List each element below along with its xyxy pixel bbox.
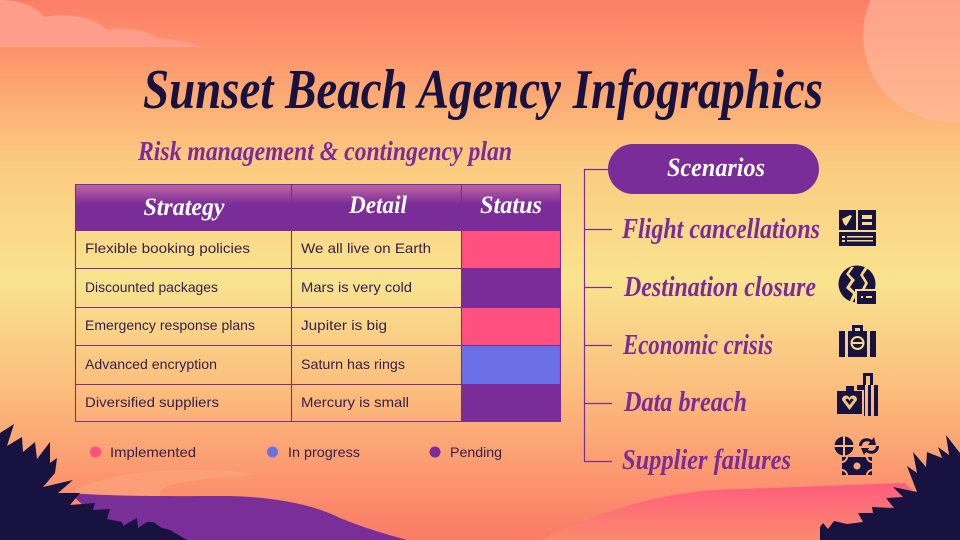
icon: supplier globe and money (834, 436, 879, 475)
table text: Advanced encryption (85, 356, 217, 372)
subtitle: Risk management & contingency plan (137, 136, 512, 166)
table text (85, 240, 431, 410)
legend: In progress (288, 444, 360, 460)
table text: We all live on Earth (301, 240, 431, 256)
title: Sunset Beach Agency Infographics (143, 59, 823, 121)
table text: Mercury is small (301, 394, 409, 410)
scenario labels: Destination closure (623, 271, 816, 303)
table text: Diversified suppliers (85, 394, 219, 410)
palm left (0, 424, 187, 540)
table (75, 184, 561, 422)
scenario labels: Economic crisis (622, 329, 773, 361)
table header: Detail (348, 192, 407, 219)
table text: Saturn has rings (301, 356, 405, 372)
status cells (461, 230, 561, 422)
table text: Emergency response plans (85, 317, 255, 333)
table text: Flexible booking policies (85, 240, 250, 256)
scenario labels: Flight cancellations (621, 213, 820, 245)
table text: Mars is very cold (301, 279, 412, 295)
table header: Strategy (144, 194, 225, 221)
scenario labels (621, 213, 820, 476)
table header (75, 184, 561, 230)
cloud top left (0, 0, 200, 47)
scenario labels: Supplier failures (622, 444, 791, 476)
icon: cracked globe (838, 266, 877, 304)
table text: Discounted packages (85, 279, 218, 295)
pink hill (540, 483, 960, 540)
scenarios pill (608, 144, 819, 194)
purple hill (70, 493, 407, 540)
low cloud (75, 470, 257, 497)
scenarios pill: Scenarios (667, 153, 765, 182)
sun (863, 0, 960, 122)
icon: luggage heart (837, 373, 878, 416)
palm right (820, 435, 960, 540)
legend: Implemented (110, 444, 196, 460)
icon: suitcase crisis (839, 325, 876, 357)
legend (90, 444, 502, 460)
connector lines (584, 170, 612, 462)
table header: Status (480, 192, 542, 219)
scenario labels: Data breach (623, 386, 747, 418)
icon: flight board (839, 210, 876, 246)
table text: Jupiter is big (301, 317, 387, 333)
legend: Pending (450, 444, 502, 460)
